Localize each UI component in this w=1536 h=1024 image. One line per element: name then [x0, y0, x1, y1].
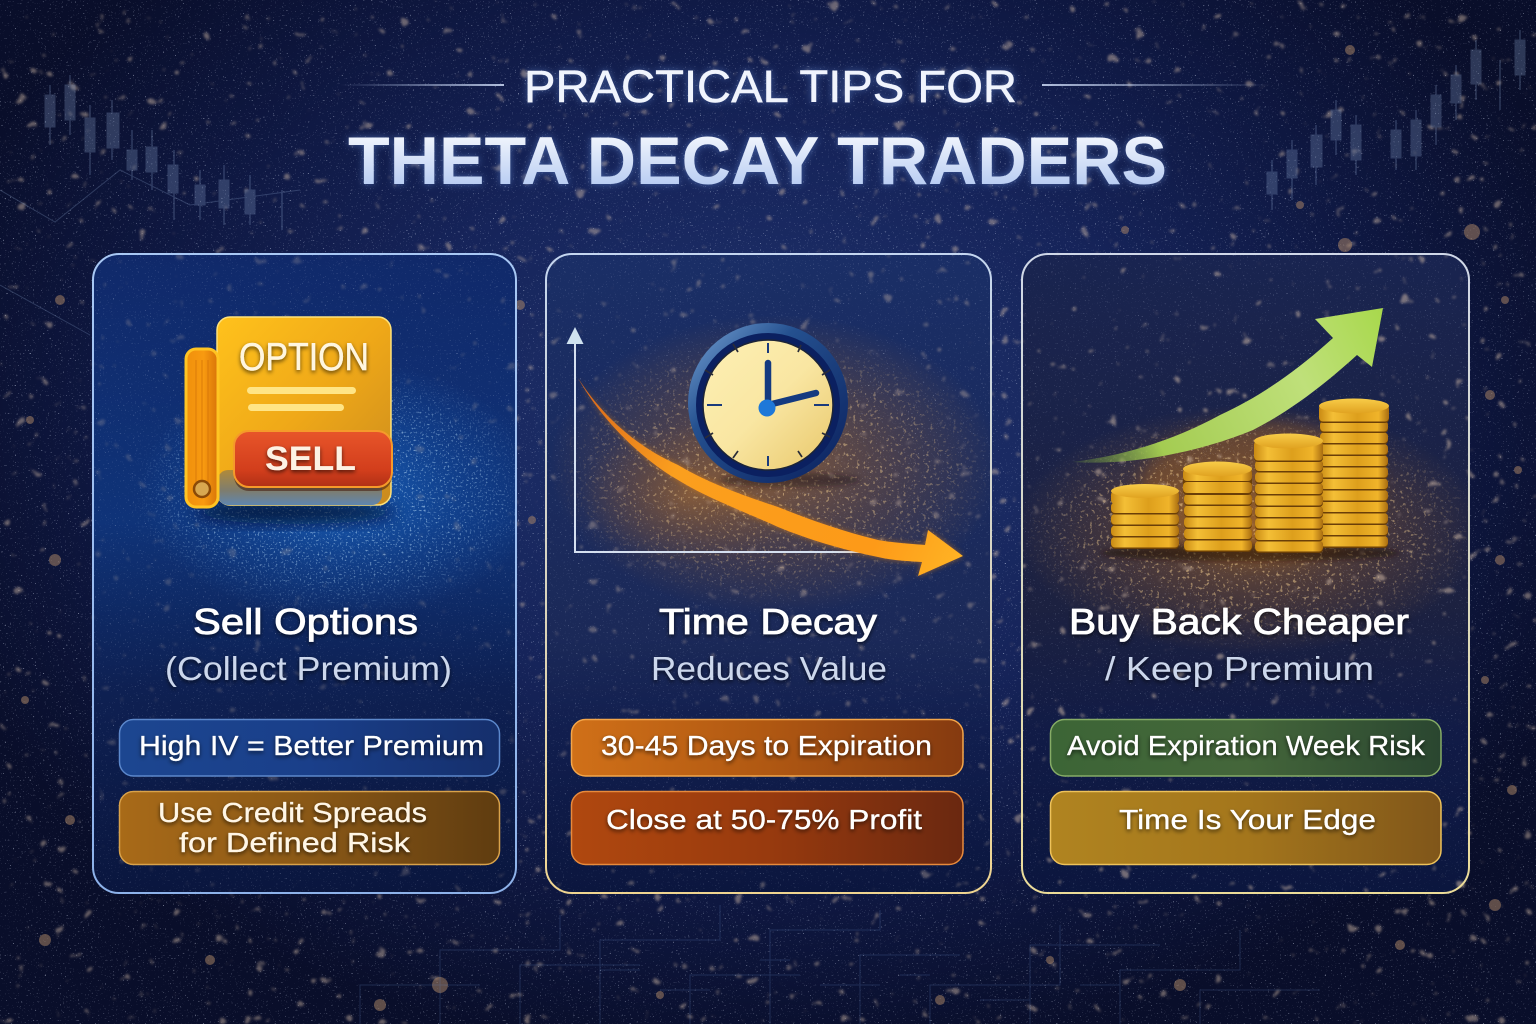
subheading: collect premium: (Collect Premium) [165, 650, 452, 687]
coin stack 2 [1183, 462, 1252, 552]
heading: time decay: Time Decay [659, 601, 877, 642]
pill: high iv: High IV = Better Premium [139, 730, 484, 761]
pill: credit spreads: Use Credit Spreads [158, 797, 427, 828]
decorative title rule left [340, 84, 504, 86]
icon: coin stacks [1100, 398, 1400, 561]
growth arrow [1072, 308, 1383, 463]
icon text: option: OPTION [239, 336, 369, 379]
candlestick chart, top left [0, 75, 300, 335]
icon: clock [688, 323, 860, 487]
decorative title rule right [1042, 84, 1270, 86]
icon text: sell: SELL [265, 440, 356, 478]
pill: time is your edge: Time Is Your Edge [1119, 804, 1376, 835]
chart axes [566, 327, 950, 552]
candlestick chart, top right [1267, 30, 1525, 210]
coin stack 1 [1111, 484, 1179, 549]
decay arrow [578, 378, 963, 576]
title line 1: PRACTICAL TIPS FOR [524, 61, 1017, 112]
title line 2: THETA DECAY TRADERS [348, 123, 1167, 199]
pill: time is your edge [1050, 792, 1441, 864]
coin stack 4 [1319, 398, 1389, 548]
pill: days to expiration: 30-45 Days to Expiration [601, 730, 932, 761]
pill: close at profit: Close at 50-75% Profit [606, 804, 922, 835]
coin stack 3 [1254, 434, 1323, 553]
subheading: reduces value: Reduces Value [651, 650, 887, 687]
panel: time decay [546, 254, 1000, 894]
pill: close at profit [572, 792, 963, 864]
heading: sell options: Sell Options [193, 601, 418, 642]
pill: avoid expiration week: Avoid Expiration Week Risk [1067, 730, 1426, 761]
pill: days to expiration [572, 720, 963, 776]
panel: buy back cheaper [1015, 254, 1485, 894]
circuit pattern, bottom [360, 905, 1320, 1024]
pill: avoid expiration week [1050, 720, 1441, 776]
panel: sell options [93, 254, 540, 894]
title [340, 61, 1270, 199]
icon: option sell ticket [186, 317, 395, 524]
heading: buy back cheaper: Buy Back Cheaper [1069, 601, 1409, 642]
pill: credit spreads [120, 792, 500, 864]
pill: high iv [120, 720, 500, 776]
subheading: keep premium: / Keep Premium [1105, 650, 1374, 687]
pill: credit spreads: for Defined Risk [179, 827, 411, 858]
